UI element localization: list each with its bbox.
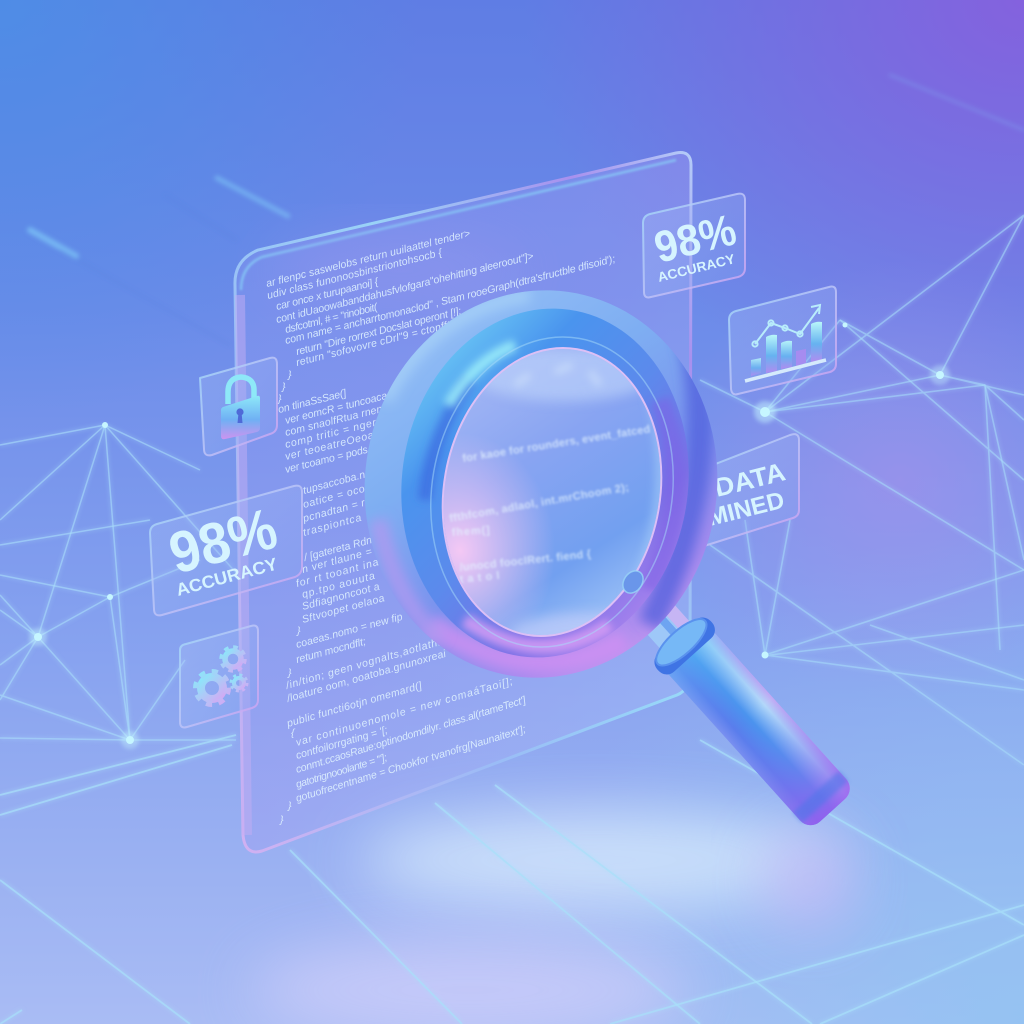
code lines: oatice = ocoa — [302, 481, 372, 511]
code lines: com snaolfRtua rnen — [284, 403, 384, 439]
lens rim — [407, 318, 697, 666]
code lines: Sftvoopet oelaoa — [301, 592, 386, 626]
magnified code: fhem(] — [451, 524, 490, 539]
magnified code: ffthfcom, adlaol, int.mrChoom 2); — [448, 482, 630, 525]
card: 98% accuracy left — [150, 486, 302, 615]
magnified code — [448, 423, 651, 586]
code lines: /loature oom, ooatoba.gnunoxreai — [285, 648, 448, 705]
stat label: ACCURACY — [656, 251, 736, 285]
code lines: dsfcotml, # = "rinoboit( — [284, 301, 380, 336]
code lines: traspiontca — [302, 512, 363, 539]
card: gears icon — [180, 626, 258, 727]
magnified code: tatol — [459, 570, 500, 586]
card: lock icon — [200, 358, 277, 455]
code lines: cont idUaoowabanddahusfvlofgara"ohehitting aleeroout"]> — [275, 250, 535, 326]
code lines: conmt.ccaosRaue:optinodomdilyr. class.al(rtameTect'] — [294, 694, 528, 776]
code lines: gatotrignooolante = '"]; — [294, 752, 389, 791]
code lines: on tlinaSsSae(] — [277, 387, 349, 416]
code lines: } — [281, 381, 286, 393]
card: 98% accuracy right — [643, 194, 745, 297]
code lines: } — [296, 625, 301, 637]
card: bar chart — [729, 287, 836, 394]
code lines: /in/tion; geen vognalts,aotlathi — [284, 636, 442, 692]
lens reflections — [444, 349, 660, 635]
icon: gears — [196, 648, 247, 704]
code lines: gotuofrecentname = Chookfor tvanofrg[Naunaitext']; — [294, 723, 527, 805]
code lines: comp tritic = ngern — [284, 415, 384, 451]
stat label: ACCURACY — [174, 554, 280, 600]
stat value: 98% — [163, 496, 284, 587]
ring front face — [379, 290, 711, 676]
chart bars — [751, 322, 822, 376]
chart baseline — [745, 360, 826, 381]
lens — [420, 330, 684, 654]
lens joint — [619, 567, 647, 597]
code lines: Sdfiagnoncoot a — [301, 581, 381, 613]
code lines: ver teoeatreOeoar — [284, 428, 379, 463]
code lines: ver eomcR = tuncoaca — [284, 390, 389, 427]
code lines: ver tcoamo = pods — [284, 444, 370, 476]
code lines: return "sofovovre cDrl"9 = ctonfftse — [295, 316, 463, 369]
code lines — [265, 227, 617, 826]
code lines: contfoilorrgating = '[; — [295, 724, 389, 762]
code lines: / [gatereta Rdn — [302, 534, 373, 564]
code lines: } — [279, 814, 284, 826]
code lines: pcnadtan = re — [301, 495, 372, 525]
magnified code: /unocd fooclRert. fiend { — [459, 548, 592, 574]
stat value: 98% — [650, 205, 741, 273]
handle — [618, 578, 859, 834]
right network mesh — [700, 215, 1024, 765]
code lines: tupsaccoba.ne — [302, 467, 372, 497]
chart trend line — [752, 305, 820, 347]
code lines: udiv class funonoosbinstriontohsocb { — [266, 246, 445, 302]
code lines: } — [287, 800, 292, 812]
outer ring — [340, 267, 742, 701]
code lines: n ver tlaune = — [301, 546, 373, 576]
ring shading — [378, 295, 700, 662]
card heading: DATA — [711, 456, 789, 503]
card: data mined — [700, 434, 799, 546]
icon: padlock — [221, 377, 260, 439]
code lines: retum mocndflt; — [295, 636, 367, 666]
code lines: var continuoenomole = new comaáTaoi[]; — [295, 675, 514, 749]
face shading — [425, 345, 675, 646]
network nodes — [754, 322, 950, 658]
code lines: } — [287, 667, 292, 679]
code lines: for rt tooant ina — [295, 556, 380, 590]
left network mesh — [0, 422, 238, 749]
code lines: ar flenpc saswelobs return uuilaattel tender> — [265, 227, 471, 290]
card subheading: MINED — [705, 487, 787, 532]
magnifying glass — [364, 290, 850, 826]
code lines: car once x turupaanoi] { — [275, 276, 381, 313]
floor grid lines — [0, 735, 1024, 1024]
code lines: { — [291, 727, 296, 739]
panel: glass code sheet — [235, 152, 691, 852]
code lines: qp.tpo aouuta — [301, 570, 376, 601]
magnified code: for kaoe for rounders, event_fatced — [462, 423, 651, 465]
code lines: public functi6otjn omemard(] — [285, 679, 424, 730]
code lines: return "Dire rorrext Docslat operont [!]; — [295, 305, 463, 358]
network nodes — [29, 422, 139, 749]
light streaks — [30, 75, 1024, 345]
code lines: coaeas.nomo = new fip — [295, 611, 404, 651]
code lines: } — [277, 393, 282, 405]
code lines: com name = ancharrtomonaclod" , Stam rooeGraph(dtra'sfructble dfisoid'); — [284, 253, 617, 347]
code lines: } — [287, 369, 292, 381]
